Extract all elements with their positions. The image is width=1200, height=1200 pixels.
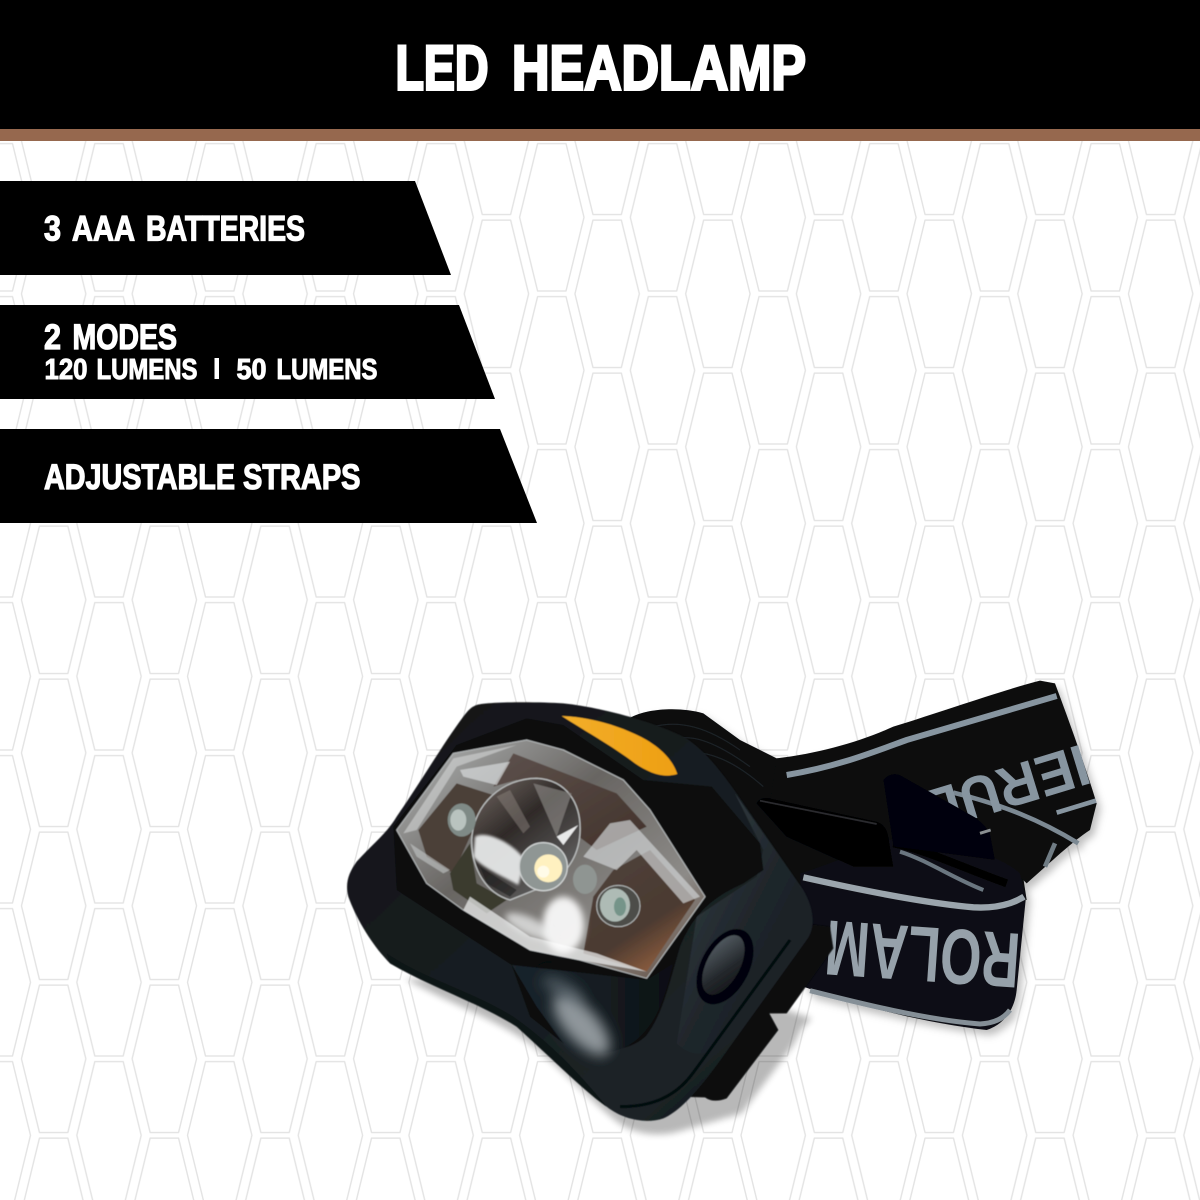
lumens values: 50 <box>236 354 266 386</box>
lower front strap <box>800 837 1026 1030</box>
header bar <box>0 0 1200 141</box>
upper back strap <box>770 681 1097 883</box>
feature band: batteries: 3 <box>44 208 61 248</box>
mounting bracket <box>677 923 833 1101</box>
lumens values: LUMENS <box>96 354 198 386</box>
side button <box>685 919 765 1014</box>
title <box>396 34 806 104</box>
feature band: batteries: BATTERIES <box>146 208 305 248</box>
modes heading <box>44 317 177 357</box>
headlamp body <box>347 702 833 1121</box>
upper brown panel <box>493 753 647 850</box>
feature band: straps <box>0 429 537 523</box>
main reflector <box>472 778 580 900</box>
title: LED <box>396 34 488 104</box>
lumens values <box>44 354 378 386</box>
lumens values: 120 <box>44 354 88 386</box>
strap buckle slides <box>757 774 995 867</box>
dark face panel <box>393 718 763 1050</box>
left lower olive panel <box>450 843 507 913</box>
small LED: centre <box>573 865 597 894</box>
lower casing shade <box>387 953 607 1107</box>
glossy lower panel <box>512 963 673 1065</box>
modes heading: 2 <box>44 317 61 357</box>
feature band: batteries: AAA <box>72 208 135 248</box>
strap bundle behind body <box>630 709 1027 900</box>
small LED: left <box>448 803 476 837</box>
feature band: batteries <box>0 181 451 275</box>
right brown panel <box>583 850 695 972</box>
headband strap <box>630 681 1097 1030</box>
feature band: straps: STRAPS <box>243 457 360 497</box>
feature band: modes <box>0 305 495 399</box>
casing shell <box>347 702 813 1121</box>
main LED <box>519 843 567 891</box>
feature band: straps: ADJUSTABLE <box>44 457 235 497</box>
product photo: headlamp <box>347 681 1097 1134</box>
title: HEADLAMP <box>512 34 806 104</box>
rim seam line <box>620 940 790 1107</box>
clear lens <box>397 740 705 978</box>
ground shadow <box>405 978 812 1134</box>
lower front strap: ROLAM <box>822 903 1023 1005</box>
small LED: right <box>597 885 640 927</box>
front rim highlight <box>677 793 809 1054</box>
lens reflections <box>583 820 700 903</box>
lumens values: LUMENS <box>276 354 378 386</box>
yellow switch <box>562 716 677 776</box>
upper back strap: IERUL <box>918 732 1097 842</box>
left brown panel <box>418 783 493 873</box>
modes heading: MODES <box>72 317 177 357</box>
